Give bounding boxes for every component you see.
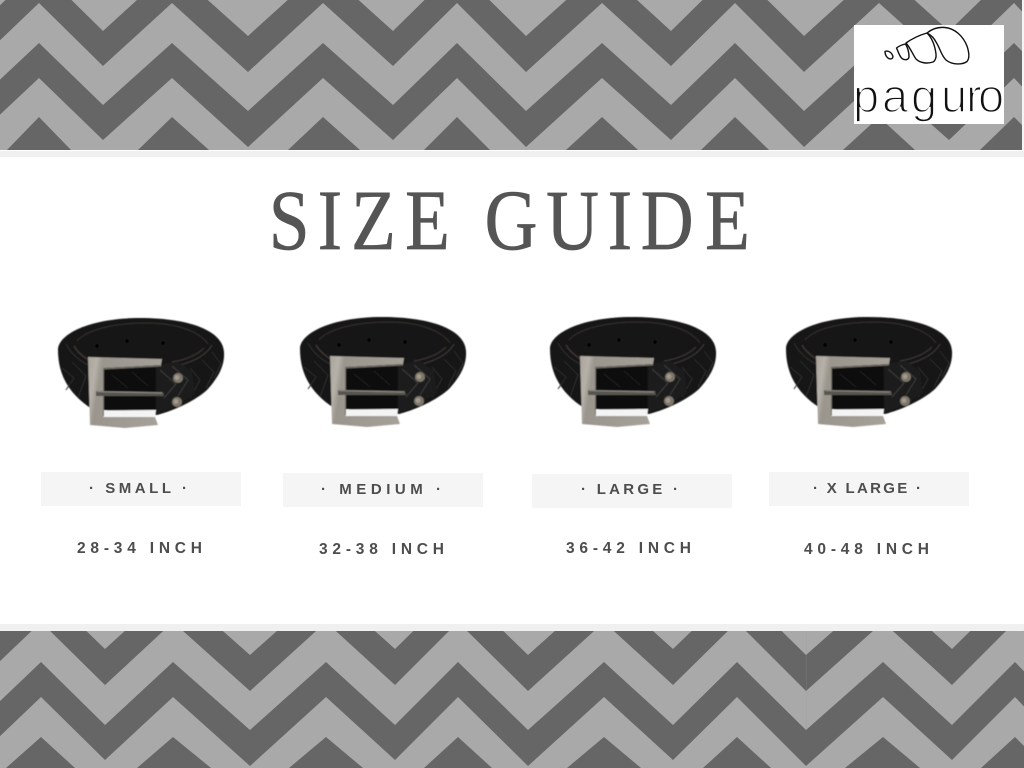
- size column: x large: [769, 317, 969, 558]
- range: medium: 32-38 INCH: [319, 541, 444, 558]
- icon: belt medium: [300, 317, 466, 427]
- size column: medium: [283, 317, 483, 558]
- top divider strip: [0, 151, 1024, 157]
- label: large: · LARGE ·: [581, 481, 678, 498]
- size column: small: [41, 318, 241, 557]
- bottom divider strip: [0, 624, 1024, 631]
- label bar: x large: [769, 472, 969, 506]
- title: SIZE GUIDE: [269, 174, 750, 268]
- label bar: large: [532, 474, 732, 508]
- label bar: medium: [283, 473, 483, 507]
- size column: large: [532, 317, 732, 557]
- icon: belt x large: [786, 317, 952, 427]
- icon: belt small: [58, 318, 224, 428]
- logo wordmark: paguro: [853, 69, 1004, 122]
- logo: paguro: [853, 25, 1004, 124]
- label: medium: · MEDIUM ·: [321, 481, 441, 498]
- range: x large: 40-48 INCH: [804, 541, 929, 558]
- icon: shell: [885, 27, 969, 64]
- label bar: small: [41, 472, 241, 506]
- label: x large: · X LARGE ·: [813, 480, 921, 497]
- top chevron banner: [0, 0, 1024, 150]
- range: small: 28-34 INCH: [77, 540, 202, 557]
- label: small: · SMALL ·: [89, 480, 187, 497]
- range: large: 36-42 INCH: [566, 540, 691, 557]
- bottom chevron banner: [0, 631, 1024, 768]
- icon: belt large: [550, 317, 716, 427]
